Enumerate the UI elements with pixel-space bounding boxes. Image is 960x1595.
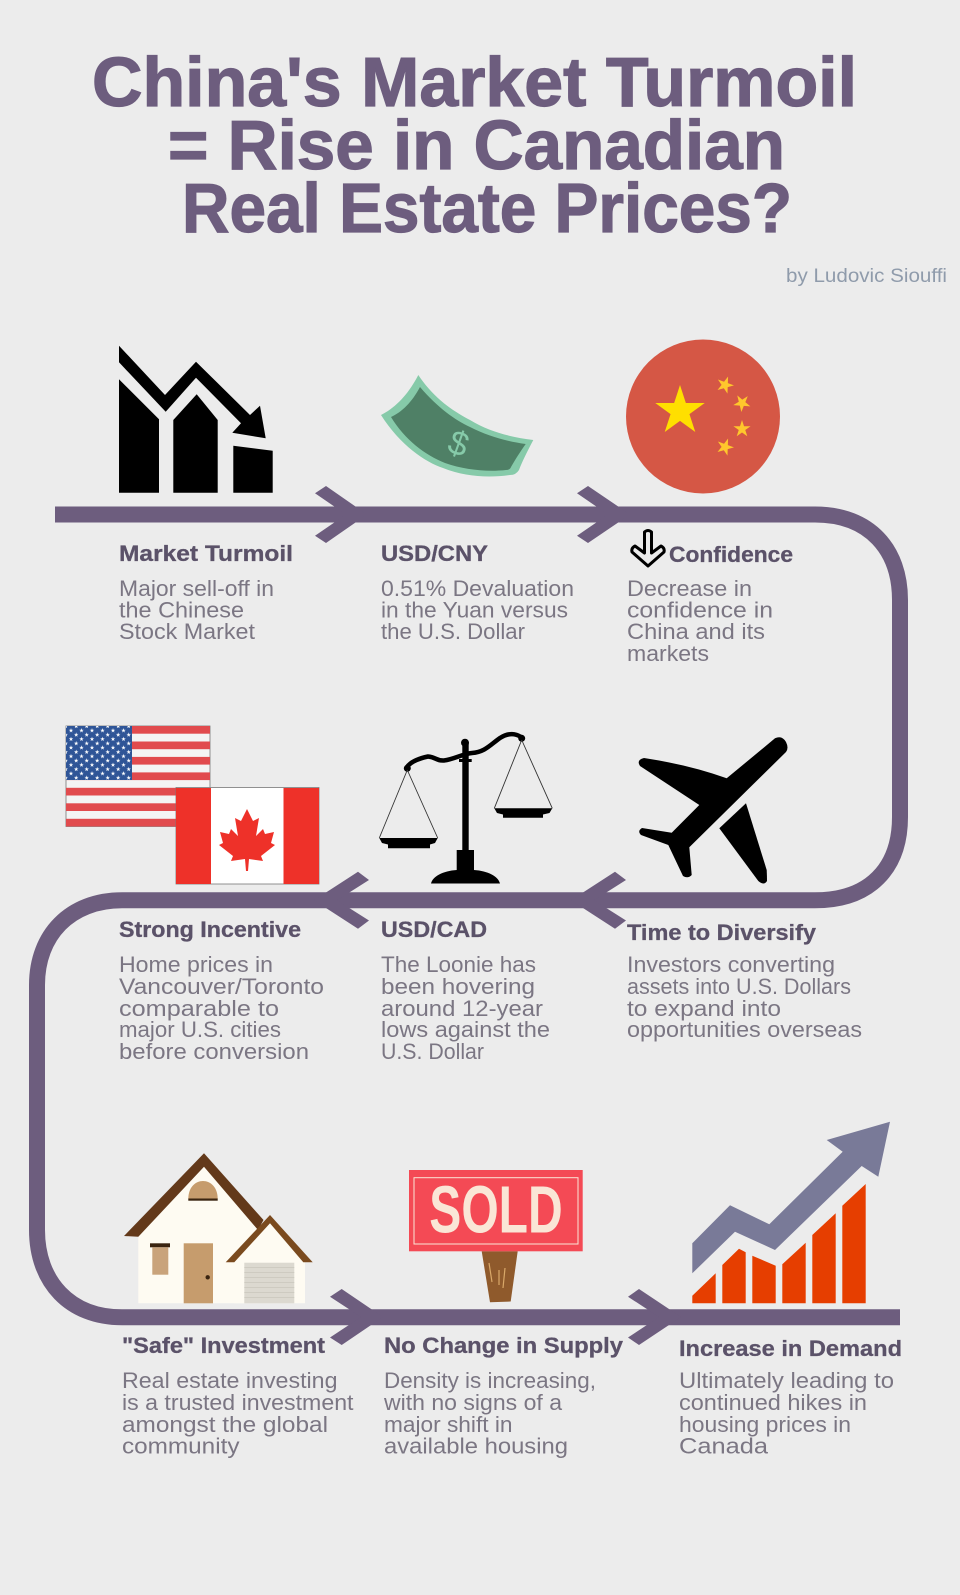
text block: Time to Diversify: opportunities overseas [627,1017,862,1042]
icon: banknote: $ [443,423,474,465]
text block: No Change in Supply: No Change in Supply [384,1333,624,1358]
text block: Increase in Demand: Increase in Demand [679,1336,902,1361]
text block: Strong Incentive [119,917,324,1064]
text block: No Change in Supply: with no signs of a [383,1390,563,1415]
icon: US flag [66,726,210,826]
icon: down arrow [632,530,664,566]
icon: Canada flag [176,788,319,884]
title: = Rise in Canadian [168,106,785,184]
text block: Increase in Demand: Ultimately leading to [679,1368,894,1393]
text block: Market Turmoil: Stock Market [119,619,255,644]
text block: Strong Incentive: before conversion [119,1039,309,1064]
flow line path [37,514,900,1317]
text block: No Change in Supply: major shift in [384,1412,512,1437]
text block: Safe Investment: Real estate investing [122,1368,338,1393]
text block: USD/CNY: the U.S. Dollar [381,619,525,644]
text block: Strong Incentive: Vancouver/Toronto [119,974,324,999]
text block: No Change in Supply [383,1333,624,1458]
arrow: flow chevron 1 [315,486,367,543]
text block: Safe Investment: amongst the global [122,1412,328,1437]
text block: Strong Incentive: Home prices in [119,952,273,977]
text block: Time to Diversify: Investors converting [627,952,835,977]
icon: falling chart [119,346,273,493]
icon: airplane [639,737,788,884]
text block: Confidence: China and its [627,619,765,644]
text block: Market Turmoil: Major sell-off in [119,576,274,601]
text block: Safe Investment: "Safe" Investment [122,1333,326,1358]
text block: USD/CNY [381,541,574,644]
text block: Increase in Demand: housing prices in [679,1412,851,1437]
arrow: flow chevron 4 [314,872,369,929]
text block: Time to Diversify [627,920,862,1042]
arrow: flow chevron 2 [577,486,630,543]
text block: Increase in Demand: continued hikes in [679,1390,867,1415]
text block: Increase in Demand: Canada [679,1434,769,1458]
text block: Confidence: markets [627,641,709,666]
text block: No Change in Supply: Density is increasing, [384,1368,596,1393]
text block: USD/CAD [381,917,550,1064]
arrow: flow chevron 6 [628,1289,681,1345]
text block: USD/CNY: USD/CNY [381,541,488,566]
text block: Safe Investment [122,1333,354,1458]
text block: USD/CNY: in the Yuan versus [381,598,568,622]
text block: Time to Diversify: Time to Diversify [627,920,817,945]
arrow: flow chevron 3 [571,872,626,929]
icon: banknote [381,375,533,477]
text block: Confidence: Confidence [669,542,793,567]
text block: Market Turmoil [119,541,293,644]
icon: SOLD sign: SOLD [429,1173,563,1248]
text block: Safe Investment: community [122,1434,240,1458]
text block: USD/CAD: been hovering [381,974,535,999]
icon: rising chart [692,1122,890,1303]
text block: USD/CAD: around 12-year [381,996,543,1021]
arrow: flow chevron 5 [330,1289,383,1345]
text block: Market Turmoil: Market Turmoil [119,541,293,566]
icon: house [124,1153,313,1303]
text block: USD/CAD: U.S. Dollar [381,1039,484,1064]
title: Real Estate Prices? [182,169,792,247]
text block: Time to Diversify: to expand into [627,996,781,1021]
title [92,43,857,247]
text block: USD/CAD: The Loonie has [381,952,536,977]
text block: Increase in Demand [679,1336,902,1458]
icon: SOLD sign [409,1170,583,1302]
text block: Safe Investment: is a trusted investment [122,1390,354,1415]
title: China's Market Turmoil [92,43,857,121]
byline: by Ludovic Siouffi [786,266,947,287]
text block: Strong Incentive: major U.S. cities [119,1017,281,1042]
text block: USD/CAD: lows against the [381,1017,550,1042]
text block: USD/CNY: 0.51% Devaluation [381,576,574,601]
text block: Confidence [627,542,793,666]
text block: Market Turmoil: the Chinese [119,598,244,622]
text block: Time to Diversify: assets into U.S. Dollars [627,974,851,999]
text block: No Change in Supply: available housing [384,1434,568,1458]
icon: balance scale [379,734,552,884]
text block: Confidence: Decrease in [627,576,752,601]
icon: China flag circle [626,340,780,494]
text block: Strong Incentive: Strong Incentive [119,917,301,942]
text block: USD/CAD: USD/CAD [381,917,487,942]
text block: Strong Incentive: comparable to [119,996,279,1021]
text block: Confidence: confidence in [627,598,773,622]
